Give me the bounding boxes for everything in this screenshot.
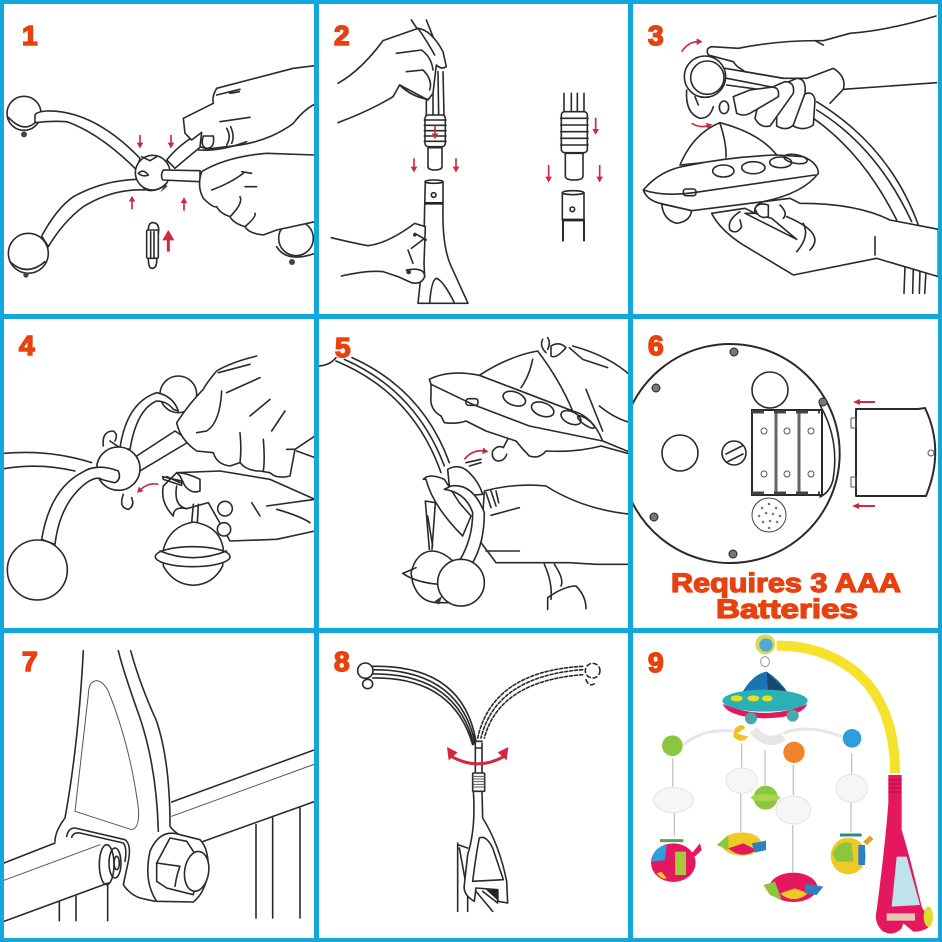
- green planet: [751, 786, 780, 810]
- battery door: [851, 408, 935, 496]
- battery caption: [671, 568, 901, 624]
- hook emblem: [755, 634, 775, 667]
- battery caption: Batteries: [716, 594, 858, 624]
- dashed arm: [478, 663, 600, 738]
- step number 4: 4: [19, 330, 35, 361]
- hub and grip: [423, 459, 484, 563]
- big hand: [177, 356, 315, 477]
- disc and arm pieces: [684, 56, 783, 118]
- red arrows: [852, 399, 875, 509]
- UFO: [643, 123, 818, 223]
- step number 7: 7: [22, 646, 38, 677]
- right side close-up: [561, 93, 588, 241]
- left arm, hub and ball: [4, 376, 197, 600]
- lower hand and thumb: [163, 471, 315, 541]
- red arrows: [682, 42, 708, 127]
- step number 6: 6: [648, 330, 664, 361]
- white mobile arms: [683, 729, 842, 745]
- battery caption: Requires 3 AAA: [671, 568, 901, 598]
- panel 7: clamp on crib rail: [4, 646, 315, 921]
- airplane middle: [717, 832, 766, 856]
- step number 5: 5: [335, 332, 351, 363]
- clamp neck and lower hand: [331, 180, 468, 303]
- panel 6: battery compartment: [632, 330, 935, 624]
- safety pin: [147, 223, 159, 268]
- panel 2: join the pole: [331, 20, 600, 303]
- fingers: [733, 78, 815, 129]
- curved arm and crib legs: [813, 102, 926, 293]
- panel 9: finished mobile: [648, 634, 933, 934]
- airplane lower: [763, 873, 823, 902]
- lower hand: [712, 198, 938, 277]
- pink clamp base: [876, 775, 933, 934]
- UFO toy: [722, 672, 808, 724]
- helicopter right: [831, 835, 872, 874]
- arms, hub and balls: [7, 96, 315, 278]
- step number 9: 9: [648, 647, 664, 678]
- UFO: [429, 351, 631, 461]
- step number 8: 8: [334, 646, 350, 677]
- pole and spring: [473, 741, 485, 791]
- red arrow: [140, 484, 158, 490]
- bell and ball: [403, 501, 484, 606]
- step number 2: 2: [334, 20, 350, 51]
- crib corner under hand: [544, 564, 586, 609]
- lower hand: [481, 485, 631, 564]
- music box underside: [632, 344, 840, 563]
- solid arm: [358, 663, 476, 745]
- knob: [148, 833, 211, 902]
- helicopter left: [651, 841, 702, 882]
- red double arrow: [447, 747, 508, 764]
- panel 5: mount on the arm: [318, 332, 631, 609]
- panel 3: attach the music box: [643, 16, 938, 293]
- step number 1: 1: [22, 20, 38, 51]
- clamp: [458, 791, 508, 911]
- yellow hub detail: [733, 725, 748, 741]
- red arrows: [414, 118, 600, 178]
- clamp arm: [55, 651, 182, 901]
- tubes, spring and upper hand: [338, 20, 446, 170]
- curved arm: [318, 358, 449, 473]
- battery tray: [752, 410, 822, 495]
- ball ornaments: [662, 729, 861, 763]
- step number 3: 3: [648, 20, 664, 51]
- panel 8: adjust the arm: [334, 646, 600, 911]
- yellow arm: [777, 646, 895, 773]
- red arrows: [132, 135, 184, 252]
- upper hand: [542, 338, 631, 431]
- strings: [673, 743, 852, 872]
- crib rails and slats: [4, 750, 315, 921]
- hands: [183, 66, 315, 235]
- clouds: [653, 768, 867, 824]
- red arrow: [464, 451, 484, 459]
- panel 4: hang the bell: [4, 330, 315, 600]
- upper hand: [707, 16, 937, 103]
- bell: [155, 504, 230, 585]
- panel 1: assemble the arms: [7, 20, 315, 278]
